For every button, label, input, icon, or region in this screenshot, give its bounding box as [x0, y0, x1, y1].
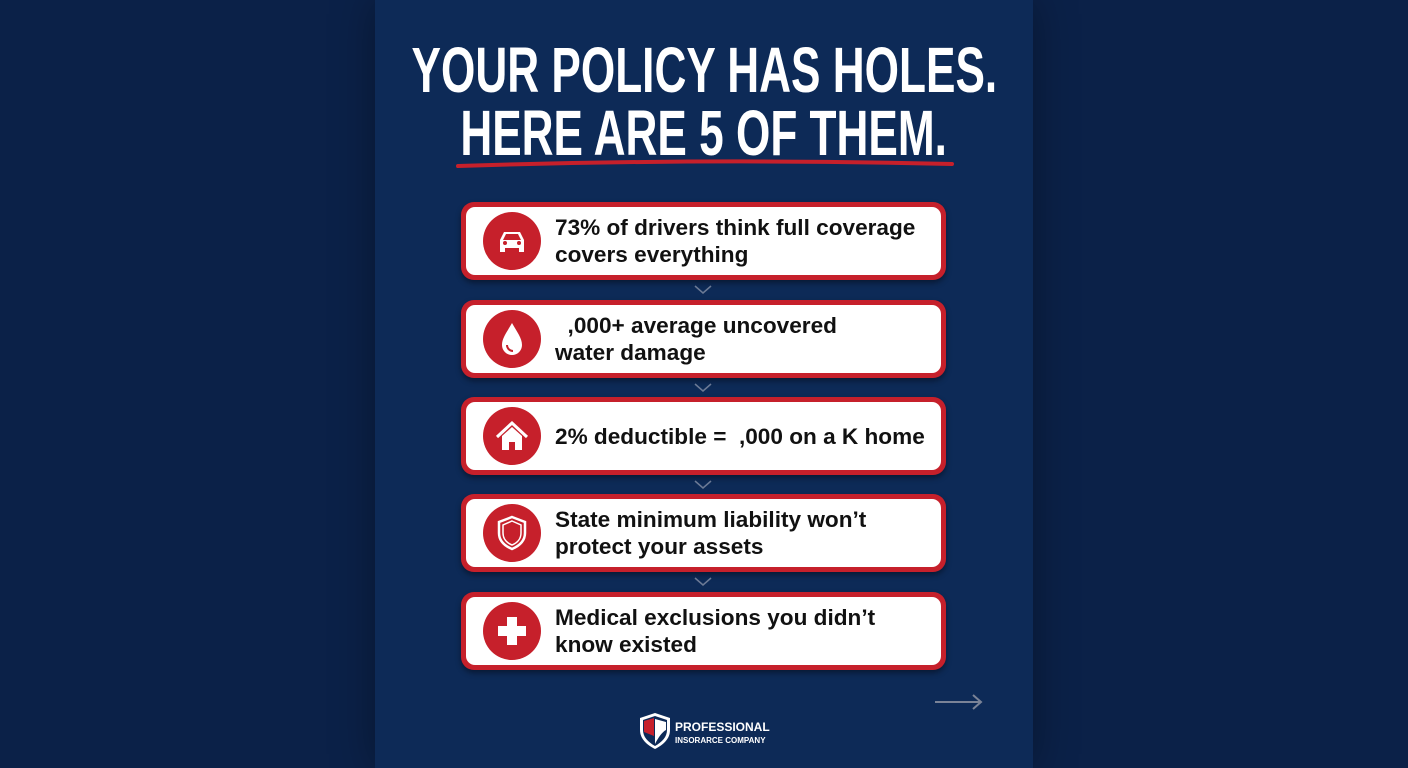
- text: covers everything: [555, 242, 748, 267]
- icon: shield: [483, 504, 541, 562]
- logo: [640, 713, 770, 749]
- text: know existed: [555, 632, 697, 657]
- card 2: water damage: [461, 300, 946, 378]
- arrow: [694, 480, 712, 489]
- arrow: [694, 384, 712, 392]
- icon: car: [483, 212, 541, 270]
- card 5: medical: [461, 592, 946, 670]
- card 4: liability: [461, 494, 946, 572]
- company name: [675, 720, 770, 745]
- title line 1: YOUR POLICY HAS HOLES.: [411, 34, 997, 106]
- icon: shield logo: [640, 713, 670, 749]
- arrow: [694, 286, 712, 294]
- center panel: [375, 0, 1033, 768]
- text: water damage: [555, 340, 706, 365]
- company name: INSORARCE COMPANY: [675, 736, 766, 745]
- card 3: deductible: [461, 397, 946, 475]
- title line 2: HERE ARE 5 OF THEM.: [461, 97, 947, 169]
- text: [555, 507, 866, 559]
- text: State minimum liability won’t: [555, 507, 866, 532]
- red underline: [456, 159, 954, 168]
- card 1: drivers: [461, 202, 946, 280]
- icon: house: [483, 407, 541, 465]
- arrow: [694, 578, 712, 586]
- text: [555, 605, 875, 657]
- arrow: next: [935, 694, 982, 710]
- text: [555, 215, 915, 267]
- icon: water drop: [483, 310, 541, 368]
- text: 73% of drivers think full coverage: [555, 215, 915, 240]
- text: ,000+ average uncovered: [568, 313, 837, 338]
- text: protect your assets: [555, 534, 763, 559]
- text: 2% deductible = ,000 on a K home: [555, 424, 925, 448]
- text: Medical exclusions you didn’t: [555, 605, 875, 630]
- company name: PROFESSIONAL: [675, 720, 770, 734]
- text: [555, 313, 837, 365]
- icon: medical cross: [483, 602, 541, 660]
